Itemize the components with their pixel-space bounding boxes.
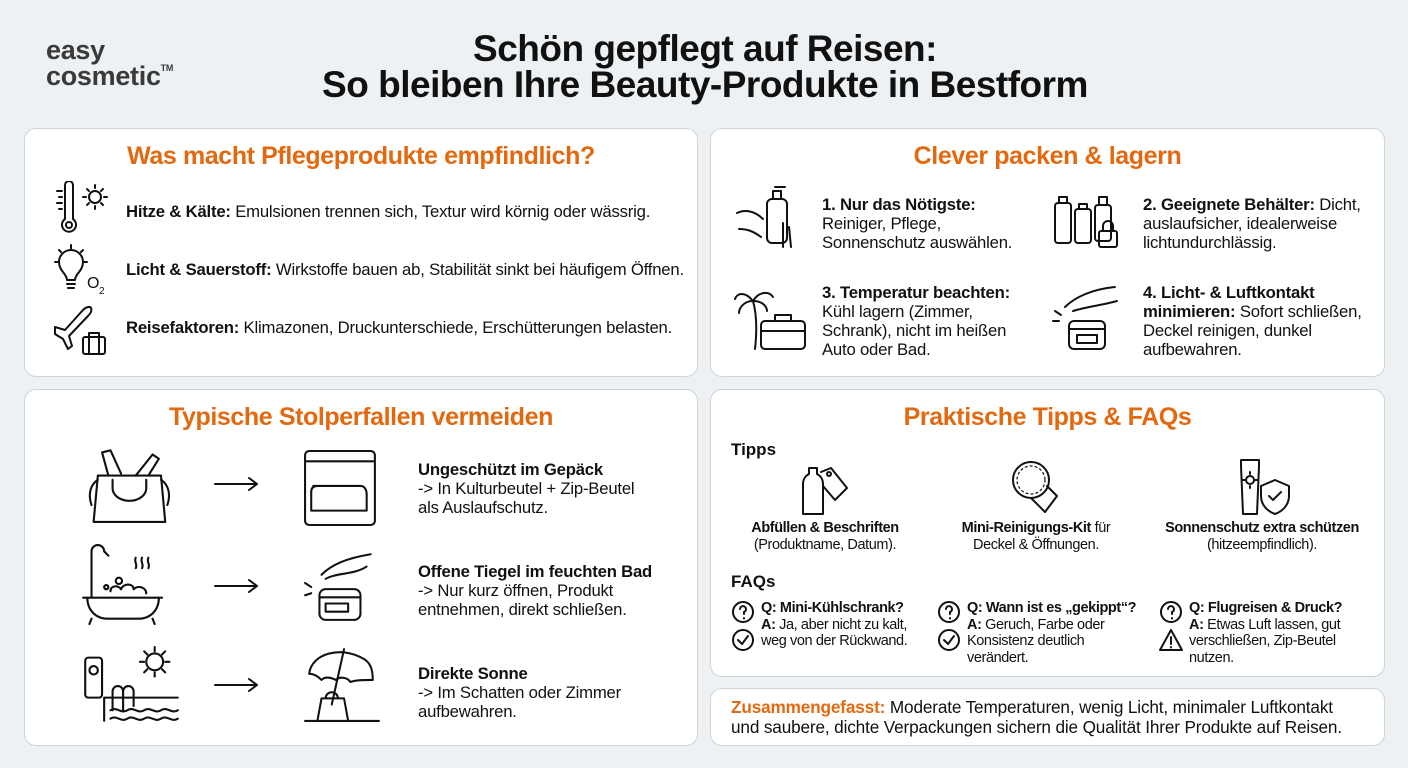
text: faq 1 [761,600,907,649]
text: faq 2: A: Geruch, Farbe oder [967,616,1104,632]
text: item 1: 1. Nur das Nötigste: [822,195,976,214]
icon: hand bottle [736,186,792,248]
text: item 1 [822,195,1012,252]
text: item 3: Auto oder Bad. [822,340,931,359]
text: faq 3 [1189,600,1342,666]
panel: Stolperfallen [24,389,698,746]
heading: Was macht Pflegeprodukte empfindlich? [127,142,595,170]
text: faq 1: Q: Mini-Kühlschrank? [761,600,904,616]
text: row 1: Ungeschützt im Gepäck [418,460,603,479]
panel: empfindlich [24,128,698,377]
text: faq 3: verschließen, Zip-Beutel [1189,633,1336,649]
tip 1 [751,467,899,552]
text: row 3: -> Im Schatten oder Zimmer [418,683,621,702]
text: item 2 [1143,195,1361,252]
icon: bulb O2 [54,244,105,297]
subheading: FAQs: FAQs [731,572,775,591]
text: faq 3: Q: Flugreisen & Druck? [1189,600,1342,616]
arrow [214,477,258,491]
text: row 2: Offene Tiegel im feuchten Bad [418,562,652,581]
text: summary [731,697,1342,737]
icon: thermometer sun [56,181,108,233]
text: item 1: Sonnenschutz auswählen. [822,233,1012,252]
text: row 1: -> In Kulturbeutel + Zip-Beutel [418,479,634,498]
text: tip 3 [1165,520,1359,552]
icon: containers lock [1054,196,1118,248]
icon: bottle tag [802,467,848,515]
text: summary: und saubere, dichte Verpackungen sichern die Qualität Ihrer Produkte auf Reisen. [731,717,1342,737]
text: item 3: Kühl lagern (Zimmer, [822,302,973,321]
text: row 2: entnehmen, direkt schließen. [418,600,627,619]
heading: Clever packen & lagern [914,142,1181,170]
icon: sunscreen shield [1240,459,1290,515]
text: tip 2 [962,520,1110,552]
text: faq 3: A: Etwas Luft lassen, gut [1189,616,1340,632]
logo: cosmeticTM [46,61,173,91]
text: Licht: Licht & Sauerstoff: Wirkstoffe bauen ab, Stabilität sinkt bei häufigem Öffnen. [126,260,684,279]
text: row 3: aufbewahren. [418,702,517,721]
icon: cotton pad [1012,461,1058,513]
logo [46,35,173,91]
text: faq 2: Q: Wann ist es „gekippt“? [967,600,1136,616]
faq 2 [937,598,1147,668]
text: tip 2: Mini-Reinigungs-Kit für [962,520,1110,536]
title: So bleiben Ihre Beauty-Produkte in Bestform [322,64,1088,105]
text: row 1: als Auslaufschutz. [418,498,548,517]
text: tip 3: Sonnenschutz extra schützen [1165,520,1359,536]
text: tip 1 [751,520,899,552]
icon: bathtub [82,544,164,626]
text: item 4: Deckel reinigen, dunkel [1143,321,1312,340]
subheading: Tipps: Tipps [731,440,776,459]
text: item 3 [822,283,1010,359]
text: item 4: aufbewahren. [1143,340,1242,359]
text: row 3 [418,664,621,721]
text: Reise: Reisefaktoren: Klimazonen, Druckunterschiede, Erschütterungen belasten. [126,318,672,337]
panel: packen [710,128,1385,377]
text: faq 2: Konsistenz deutlich [967,633,1084,649]
text: tip 1: (Produktname, Datum). [754,536,896,552]
icon: hand jar [1052,286,1118,350]
panel: Tipps FAQs [710,389,1385,677]
icon: question check [937,600,963,656]
icon: plane luggage [54,306,106,355]
icon: bulb O2: O [87,275,99,292]
icon: palm cooler [734,292,806,350]
faq 1 [732,600,907,651]
icon: question check [732,601,754,651]
text: tip 1: Abfüllen & Beschriften [751,520,899,536]
text: item 2: lichtundurchlässig. [1143,233,1276,252]
text: summary: Zusammengefasst: Moderate Temperaturen, wenig Licht, minimaler Luftkontakt [731,697,1333,717]
text: item 2: 2. Geeignete Behälter: Dicht, [1143,195,1361,214]
text: faq 3: nutzen. [1189,650,1234,666]
text: item 1: Reiniger, Pflege, [822,214,941,233]
icon: question warning [1159,600,1185,656]
logo: easy [46,35,105,65]
tip 2 [962,461,1110,552]
text: faq 1: weg von der Rückwand. [761,633,907,649]
heading: Praktische Tipps & FAQs [904,403,1191,431]
icon: bulb O2: 2 [99,286,105,297]
faq 3 [1159,598,1369,668]
icon: sun pool [84,646,179,722]
text: Hitze: Hitze & Kälte: Emulsionen trennen sich, Textur wird körnig oder wässrig. [126,202,650,221]
title: Schön gepflegt auf Reisen: [473,28,937,69]
text: item 4: 4. Licht- & Luftkontakt [1143,283,1315,302]
text: row 2: -> Nur kurz öffnen, Produkt [418,581,613,600]
text: row 2 [418,562,652,619]
icon: zip bag [304,450,376,526]
text: tip 2: Deckel & Öffnungen. [973,536,1099,552]
icon: bag bottles [88,449,170,523]
arrow [214,579,258,593]
text: item 2: auslaufsicher, idealerweise [1143,214,1337,233]
heading: Typische Stolperfallen vermeiden [169,403,553,431]
tip 3 [1165,459,1359,552]
icon: hand jar [304,553,372,621]
text: row 1 [418,460,634,517]
text: tip 3: (hitzeempfindlich). [1207,536,1317,552]
arrow [214,678,258,692]
text: item 3: 3. Temperatur beachten: [822,283,1010,302]
text: item 4: minimieren: Sofort schließen, [1143,302,1362,321]
icon: umbrella bag [304,648,380,722]
text: item 3: Schrank), nicht im heißen [822,321,1006,340]
text: faq 2: verändert. [967,650,1028,666]
text: row 3: Direkte Sonne [418,664,528,683]
title [322,28,1088,105]
text: faq 1: A: Ja, aber nicht zu kalt, [761,616,907,632]
text: item 4 [1143,283,1362,359]
text: faq 2 [967,600,1136,666]
panel: Zusammenfassung [710,688,1385,746]
